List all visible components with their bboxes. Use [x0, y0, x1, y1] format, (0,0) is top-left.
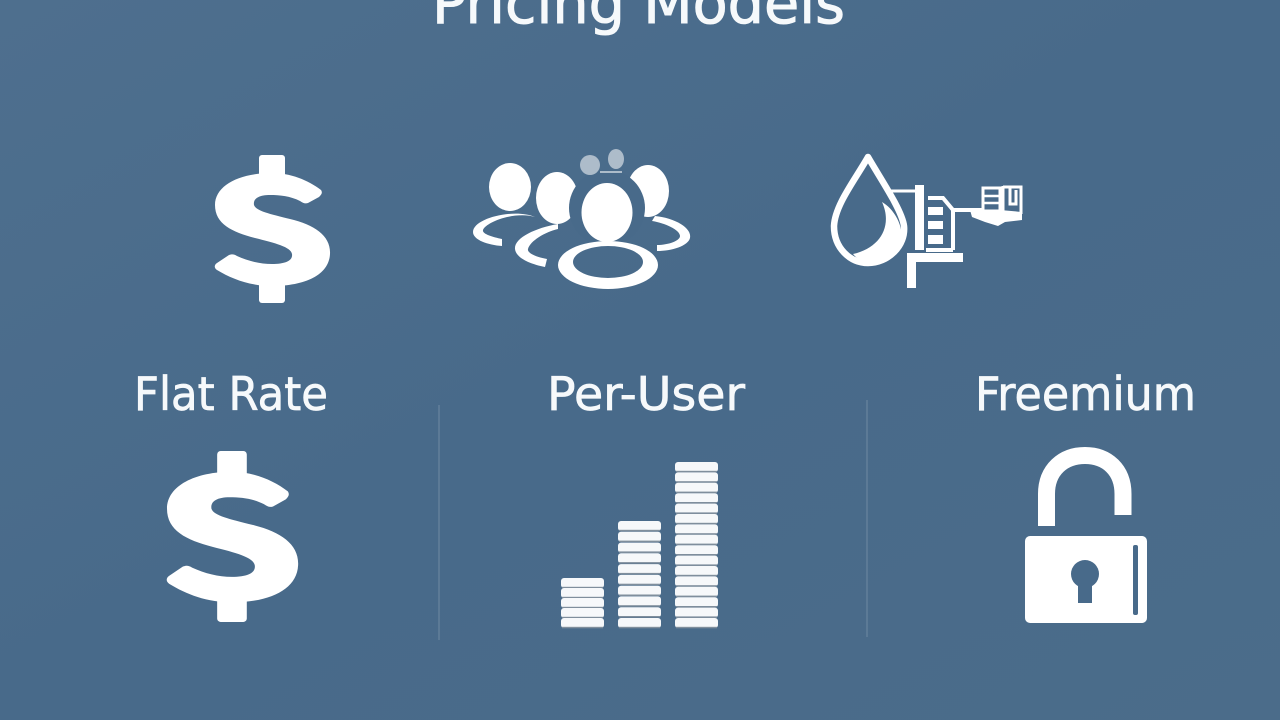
icon: open padlock [1025, 456, 1147, 623]
base [907, 253, 963, 288]
small faded heads [580, 149, 624, 175]
tall stack [675, 462, 718, 628]
icon: water drop and pump [834, 157, 1022, 288]
keyhole [1071, 560, 1099, 588]
halo behind main user [569, 170, 645, 246]
main user head [582, 183, 632, 242]
icon: dollar sign, flat rate top [215, 155, 330, 303]
body slit [1133, 545, 1138, 615]
lock body [1025, 536, 1147, 623]
back user heads [489, 163, 669, 224]
label: freemium: Freemium [975, 367, 1196, 421]
icon: coin stacks [561, 462, 718, 628]
shackle [1046, 456, 1123, 526]
ladder rungs [928, 207, 943, 244]
drop highlight [853, 202, 902, 262]
drop [834, 157, 904, 263]
pump column [915, 185, 924, 250]
icon: group of users [473, 149, 690, 289]
outlet box [970, 210, 1022, 226]
back user shoulders [473, 214, 690, 267]
label: per-user: Per-User [547, 367, 745, 421]
short stack [561, 578, 604, 628]
medium stack [618, 521, 661, 628]
pipe [953, 208, 982, 212]
icon: dollar sign, flat rate bottom [167, 451, 298, 622]
label: flat rate: Flat Rate [134, 367, 328, 421]
main user shoulders [558, 241, 658, 289]
